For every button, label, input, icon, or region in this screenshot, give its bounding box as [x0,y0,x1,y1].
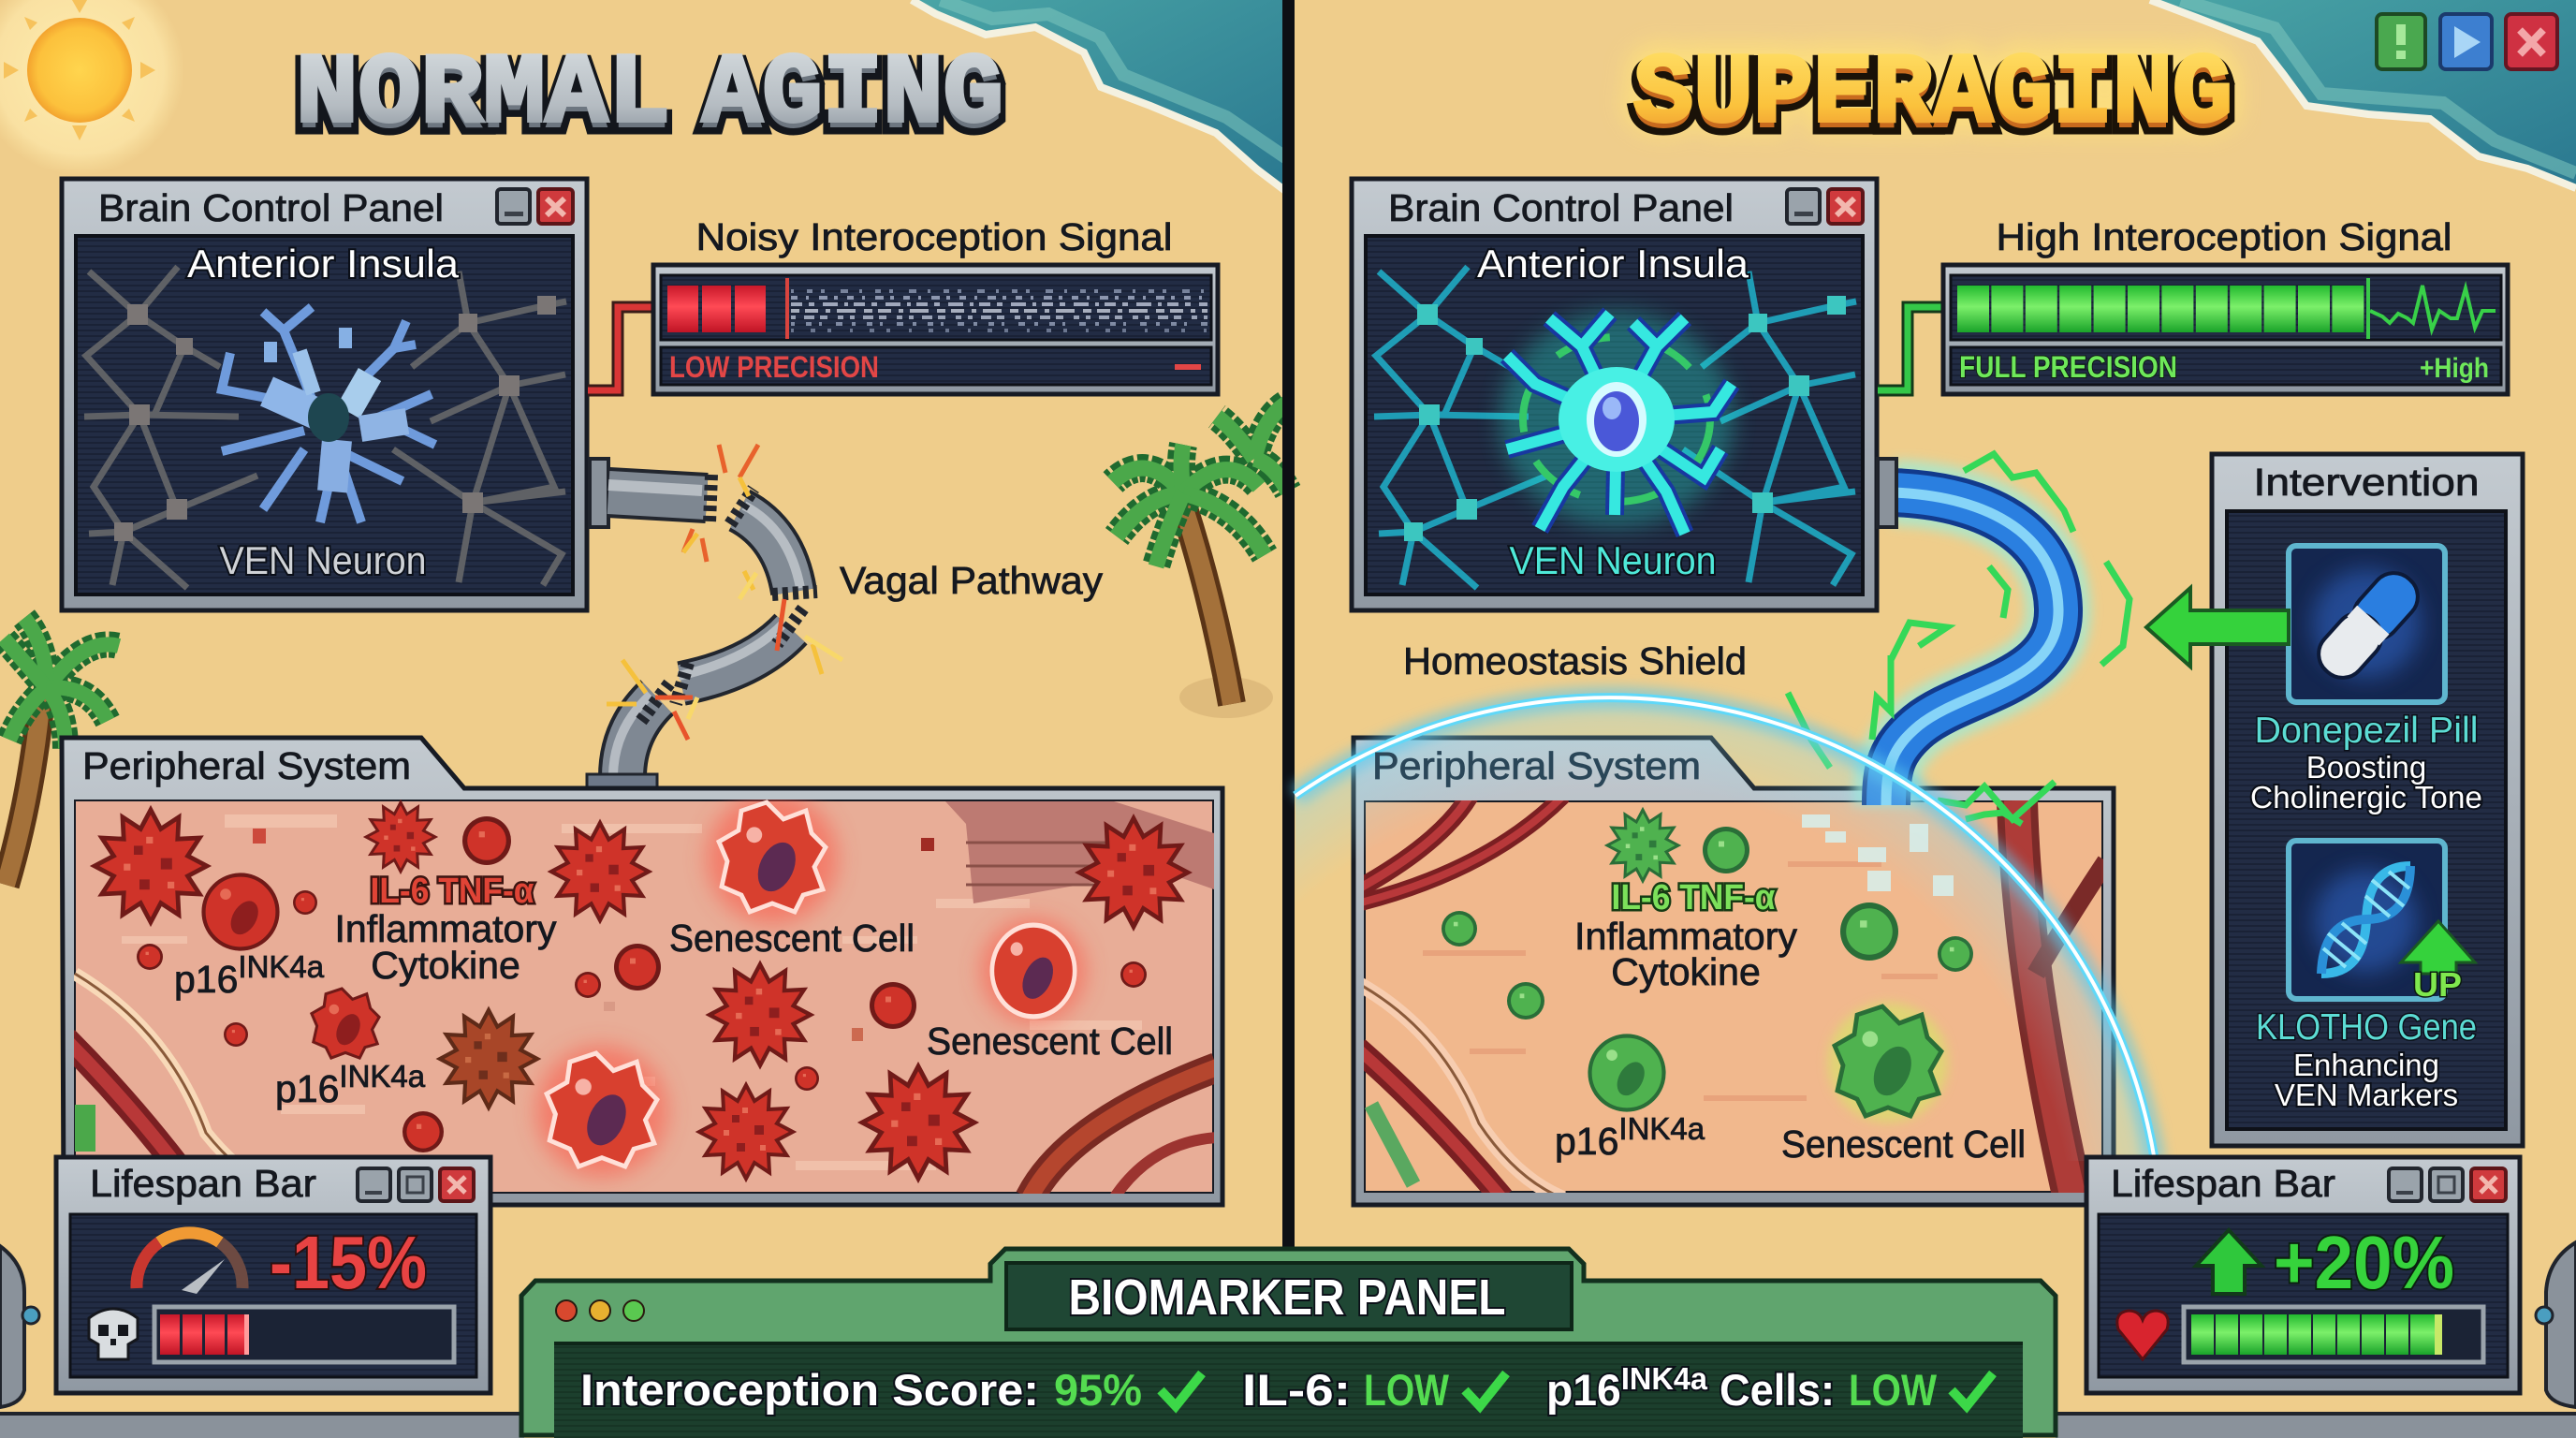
value: +20%: +20% [2274,1221,2454,1304]
lifespan progress bar [154,1307,454,1362]
window buttons [358,1168,474,1201]
metric: p16 cells [1546,1361,1993,1415]
text: boosting cholinergic tone: Boosting [2306,750,2426,785]
metric: p16 cells: INK4a [1621,1361,1708,1396]
icon: skull [89,1309,138,1359]
label: senescent cell: Senescent Cell [669,917,915,960]
label: homeostasis shield: Homeostasis Shield [1403,639,1747,682]
icon: glowing VEN neuron [1500,312,1734,534]
center divider [1282,0,1295,1259]
label: p16 marker: p16 [1555,1120,1618,1163]
metric: il-6 [1242,1365,1506,1415]
panel: noisy signal meter [653,265,1218,394]
label: p16 marker: p16 [275,1067,339,1110]
panel: peripheral system, superaging [1354,738,2114,1205]
shield impact particles [1802,814,1954,896]
red level segments [667,286,766,332]
connector: green signal wire [1878,307,1943,390]
heading: lifespan bar: Lifespan Bar [90,1162,316,1205]
bottom-left console frame [0,1246,524,1438]
heading: biomarker panel: BIOMARKER PANEL [1069,1269,1505,1326]
sparks [607,445,842,740]
heartbeat trace [2370,286,2496,330]
tissue view with cells [66,793,1217,1198]
title: Superaging: SUPERAGING [1633,45,2232,157]
window buttons [1787,189,1863,224]
label: senescent cell: Senescent Cell [927,1020,1173,1063]
title: Superaging: SUPERAGING [1633,39,2232,152]
pipe: broken vagal pathway [587,445,842,788]
label: ven neuron: VEN Neuron [1509,538,1717,582]
panel: brain control panel, normal aging [62,179,587,610]
icon: donepezil pill [2289,546,2445,702]
metric: il-6: IL-6: [1242,1365,1351,1415]
label: il-6 tnf-alpha: IL-6 TNF-α [1612,878,1775,917]
heading: brain control panel: Brain Control Panel [98,186,444,229]
label: p16 marker: INK4a [339,1059,426,1093]
title: Normal Aging: AGING [702,45,1003,157]
metric: interoception score: 95% [1054,1365,1142,1415]
icon: sun [0,0,184,175]
screen: neuron network [76,236,573,594]
icon: palm tree left [4,618,119,885]
icon: klotho gene [2289,841,2475,1004]
title: Normal Aging: AGING [702,38,1003,151]
heading: intervention: Intervention [2254,461,2479,504]
label: noisy interoception signal: Noisy Interoception Signal [696,215,1172,258]
metric: interoception score [580,1365,1202,1415]
pipe: healthy blue vagal pathway [1788,454,2130,824]
screen: healthy neuron network [1366,236,1863,594]
green level segments [1957,286,2364,332]
icon: fractured VEN neuron [222,307,435,522]
arrow: pill to vagal pathway [2146,588,2289,667]
metric: il-6: LOW [1364,1365,1450,1415]
label: donepezil pill: Donepezil Pill [2254,711,2479,751]
noise trace [791,291,1208,330]
status: full precision: FULL PRECISION [1959,350,2177,384]
status: plus high: +High [2420,353,2489,384]
metric: p16 cells: LOW [1849,1365,1938,1415]
window buttons top right [2377,14,2557,69]
healthy tissue view [1357,796,2106,1198]
status: low precision: LOW PRECISION [669,350,879,384]
metric: p16 cells: Cells: [1720,1365,1835,1415]
icon: palm tree right of normal aging [1113,403,1288,718]
panel: high signal meter [1943,265,2508,394]
arrow: lifespan up [2196,1230,2261,1294]
text: enhancing ven markers: VEN Markers [2275,1078,2458,1112]
text: boosting cholinergic tone: Cholinergic Tone [2250,780,2482,814]
label: il-6 tnf-alpha: IL-6 TNF-α [371,872,534,911]
heading: peripheral system: Peripheral System [82,744,411,787]
title: Normal Aging: NORMAL [296,45,670,157]
text: enhancing ven markers: Enhancing [2293,1048,2439,1082]
label: up: UP [2413,965,2462,1004]
title: Normal Aging [296,38,1003,157]
value: -15%: -15% [270,1221,427,1304]
bottom-right console frame [2056,1242,2576,1438]
cells: reduced green markers [1442,810,1973,1123]
label: p16 marker: INK4a [1618,1111,1705,1146]
label: p16 marker: p16 [174,958,238,1001]
label: p16 marker: INK4a [238,949,325,984]
label: anterior insula: Anterior Insula [1477,242,1749,286]
heading: brain control panel: Brain Control Panel [1388,186,1734,229]
panel: biomarker panel [521,1249,2056,1438]
label: inflammatory cytokine: Inflammatory [1574,915,1798,958]
label: high interoception signal: High Interoception Signal [1996,215,2452,258]
cells: glowing senescent cells [536,793,1086,1177]
label: senescent cell: Senescent Cell [1781,1123,2026,1166]
energy sparks [1788,454,2130,824]
panel: peripheral system, normal aging [62,738,1222,1205]
heading: lifespan bar: Lifespan Bar [2111,1162,2335,1205]
title: Superaging: SUPERAGING [1633,38,2232,151]
icon: heart [2117,1311,2168,1359]
arrow: up [2401,921,2475,974]
lifespan bar panel: normal aging [56,1157,490,1393]
metric: p16 cells: p16 [1546,1365,1622,1415]
window dots [556,1300,644,1321]
title: Normal Aging: NORMAL [296,38,670,151]
heading: peripheral system: Peripheral System [1372,744,1701,787]
cells: cytokine spikes and markers [95,802,1188,1179]
label: inflammatory cytokine: Cytokine [371,944,520,987]
label: ven neuron: VEN Neuron [219,538,427,582]
window buttons [2389,1168,2506,1201]
ocean: right panel [2150,0,2576,188]
window buttons [497,189,573,224]
connector: red signal wire [588,307,653,390]
lifespan progress bar [2184,1307,2483,1362]
label: anterior insula: Anterior Insula [187,242,460,286]
panel: intervention [2146,454,2523,1146]
label: inflammatory cytokine: Inflammatory [335,907,557,950]
icon: gauge [137,1233,242,1294]
ocean: left panel [912,0,1288,193]
label: klotho gene: KLOTHO Gene [2256,1007,2477,1048]
label: inflammatory cytokine: Cytokine [1611,950,1761,993]
label: vagal pathway: Vagal Pathway [840,559,1104,602]
homeostasis shield dome [1295,697,2155,1161]
lifespan bar panel: superaging [2086,1157,2520,1393]
panel: brain control panel, superaging [1352,179,1877,610]
metric: interoception score: Interoception Score: [580,1365,1039,1415]
